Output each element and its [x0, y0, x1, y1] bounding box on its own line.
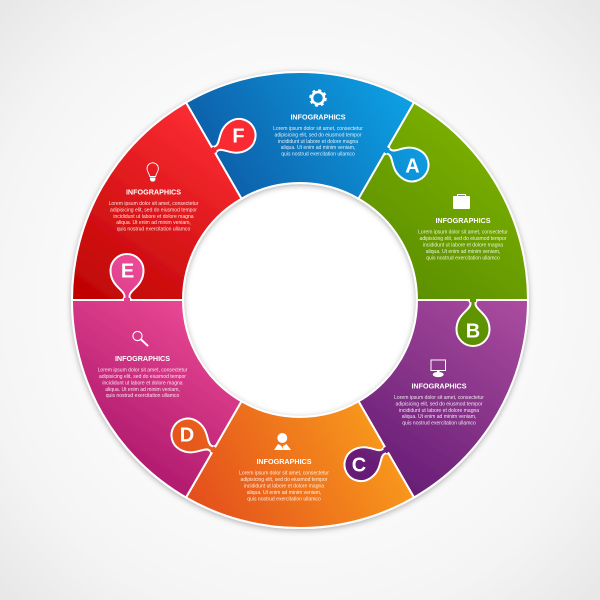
tab B shape [456, 298, 490, 346]
heading: purple: INFOGRAPHICS [411, 381, 467, 390]
panel: purple sector [358, 300, 528, 498]
icon: light bulb [147, 163, 158, 182]
text block: green: adipisicing elit, sed do eiusmod tempor [420, 236, 507, 242]
tab E shape [110, 254, 144, 302]
text block: pink: Lorem ipsum dolor sit amet, consectetur [98, 368, 188, 374]
text block: purple: Lorem ipsum dolor sit amet, consectetur [394, 395, 484, 401]
text block: pink: aliqua. Ut enim ad minim veniam, [105, 387, 180, 393]
panel: blue sector [186, 72, 414, 199]
text block: blue: adipisicing elit, sed do eiusmod tempor [275, 132, 362, 138]
panel: orange sector [186, 401, 414, 528]
donut ring [72, 72, 528, 528]
text block: red: aliqua. Ut enim ad minim veniam, [116, 220, 191, 226]
text block: green: Lorem ipsum dolor sit amet, consectetur [418, 230, 508, 236]
letter F: F [232, 126, 245, 148]
tab F shape [204, 113, 262, 165]
text block: blue: incididunt ut labore et dolore magna [278, 139, 358, 145]
text block: red: quis nostrud exercitation ullamco [117, 227, 190, 233]
text block: blue: Lorem ipsum dolor sit amet, consectetur [273, 126, 363, 132]
text block: red: incididunt ut labore et dolore magna [113, 214, 194, 220]
text block: orange: aliqua. Ut enim ad minim veniam, [247, 490, 321, 496]
tab A shape [377, 135, 435, 187]
text block: purple: incididunt ut labore et dolore magna [399, 408, 479, 414]
text block: green: quis nostrud exercitation ullamco [426, 255, 500, 261]
letter C: C [352, 454, 366, 476]
text block: purple: aliqua. Ut enim ad minim veniam, [402, 414, 476, 420]
letter B: B [466, 320, 480, 342]
text block: pink: adipisicing elit, sed do eiusmod tempor [99, 374, 186, 380]
heading: red: INFOGRAPHICS [126, 187, 181, 196]
panel: red sector [72, 102, 242, 300]
letter E: E [121, 260, 134, 282]
letter D: D [180, 424, 194, 446]
heading: pink: INFOGRAPHICS [115, 354, 170, 363]
text block: red: Lorem ipsum dolor sit amet, consectetur [109, 201, 199, 207]
icon: gear [310, 90, 326, 106]
centre hole [183, 183, 417, 417]
text block: blue: aliqua. Ut enim ad minim veniam, [281, 145, 355, 151]
panel: green sector [358, 102, 528, 300]
text block: purple: adipisicing elit, sed do eiusmod tempor [396, 401, 483, 407]
tab D shape [165, 413, 223, 465]
text block: green: aliqua. Ut enim ad minim veniam, [426, 249, 500, 255]
icon: person [274, 433, 291, 450]
heading: blue: INFOGRAPHICS [290, 112, 346, 121]
tab C shape [338, 435, 396, 487]
text block: orange: Lorem ipsum dolor sit amet, consectetur [239, 471, 329, 477]
icon: monitor [431, 360, 446, 377]
text block: orange: quis nostrud exercitation ullamco [247, 496, 321, 502]
text block: pink: incididunt ut labore et dolore magna [102, 380, 183, 386]
icon: magnifier [133, 331, 148, 346]
text block: orange: adipisicing elit, sed do eiusmod tempor [241, 477, 328, 483]
text block: red: adipisicing elit, sed do eiusmod tempor [110, 207, 197, 213]
text block: orange: incididunt ut labore et dolore magna [244, 484, 324, 490]
heading: green: INFOGRAPHICS [435, 216, 491, 225]
text block: purple: quis nostrud exercitation ullamco [402, 421, 476, 427]
text block: pink: quis nostrud exercitation ullamco [106, 393, 179, 399]
text block: blue: quis nostrud exercitation ullamco [281, 152, 355, 158]
panel: pink sector [72, 300, 241, 498]
text block: green: incididunt ut labore et dolore magna [423, 242, 503, 248]
heading: orange: INFOGRAPHICS [256, 457, 312, 466]
letter A: A [405, 156, 420, 178]
icon: briefcase [453, 194, 470, 209]
